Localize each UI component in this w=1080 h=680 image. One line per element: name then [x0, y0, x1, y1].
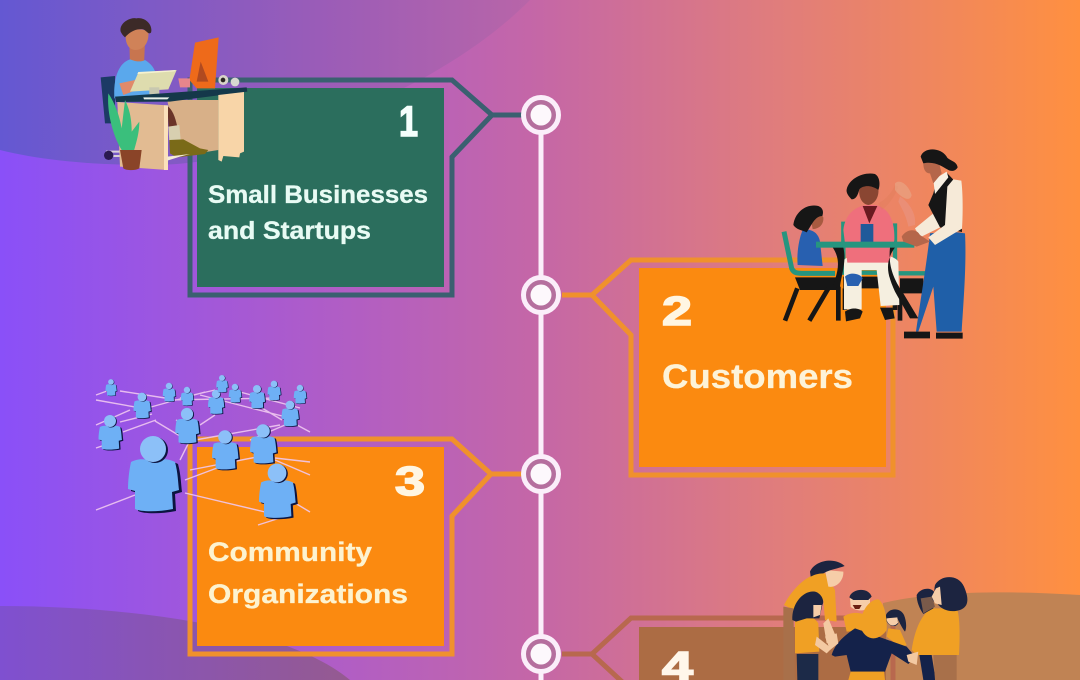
- chairs: [784, 232, 835, 273]
- timeline node 4: [524, 636, 558, 672]
- panel 1 label: and Startups: [208, 217, 371, 245]
- background blob: bottom left: [0, 606, 350, 680]
- panel 2 number: 2: [662, 288, 692, 334]
- hijab woman: [832, 628, 915, 672]
- panel 1 outline: [190, 80, 522, 295]
- panel 1: Small Businesses and Startups: [190, 80, 522, 295]
- middle boy: [843, 613, 870, 632]
- table: [833, 247, 918, 318]
- right woman: [912, 608, 960, 655]
- panel 4: cropped: [562, 618, 893, 680]
- panel 3 outline: [190, 439, 522, 654]
- panel 4 outline: [562, 618, 893, 680]
- joined hands: [825, 633, 918, 665]
- panel 3: Community Organizations: [190, 439, 522, 654]
- panel 3 label: Organizations: [208, 579, 408, 609]
- timeline line: [538, 115, 544, 680]
- panel 3 label: Community: [208, 537, 372, 567]
- network lines: [96, 390, 310, 525]
- little girl: [887, 628, 907, 647]
- back left adult: [784, 573, 837, 622]
- timeline node 2: [524, 278, 558, 312]
- seated woman: [844, 254, 899, 309]
- panel 2 outline: [562, 260, 893, 475]
- panel 3 number: 3: [395, 458, 425, 504]
- child: [797, 230, 823, 266]
- panel 2 label: Customers: [662, 358, 853, 396]
- panel 4 fill: [639, 627, 886, 680]
- timeline node 1: [524, 98, 558, 132]
- panel 1 label: Small Businesses: [208, 181, 428, 209]
- icon: waiter serving family at table: [784, 149, 965, 339]
- icon: network of people: [96, 375, 310, 525]
- icon: team joining hands: [783, 561, 967, 680]
- icon: man working at desk: [101, 18, 247, 170]
- panel 1 number: 1: [399, 98, 418, 146]
- waiter: [916, 232, 965, 332]
- network people: [128, 436, 182, 513]
- background blob: top left: [0, 0, 530, 165]
- panel 1 fill: [197, 88, 444, 287]
- front left child: [795, 616, 819, 653]
- background blob: bottom right: [883, 592, 1080, 680]
- timeline node 3: [524, 456, 558, 492]
- panel 2 fill: [639, 268, 886, 467]
- panel 2: Customers: [562, 260, 893, 475]
- panel 3 fill: [197, 447, 444, 646]
